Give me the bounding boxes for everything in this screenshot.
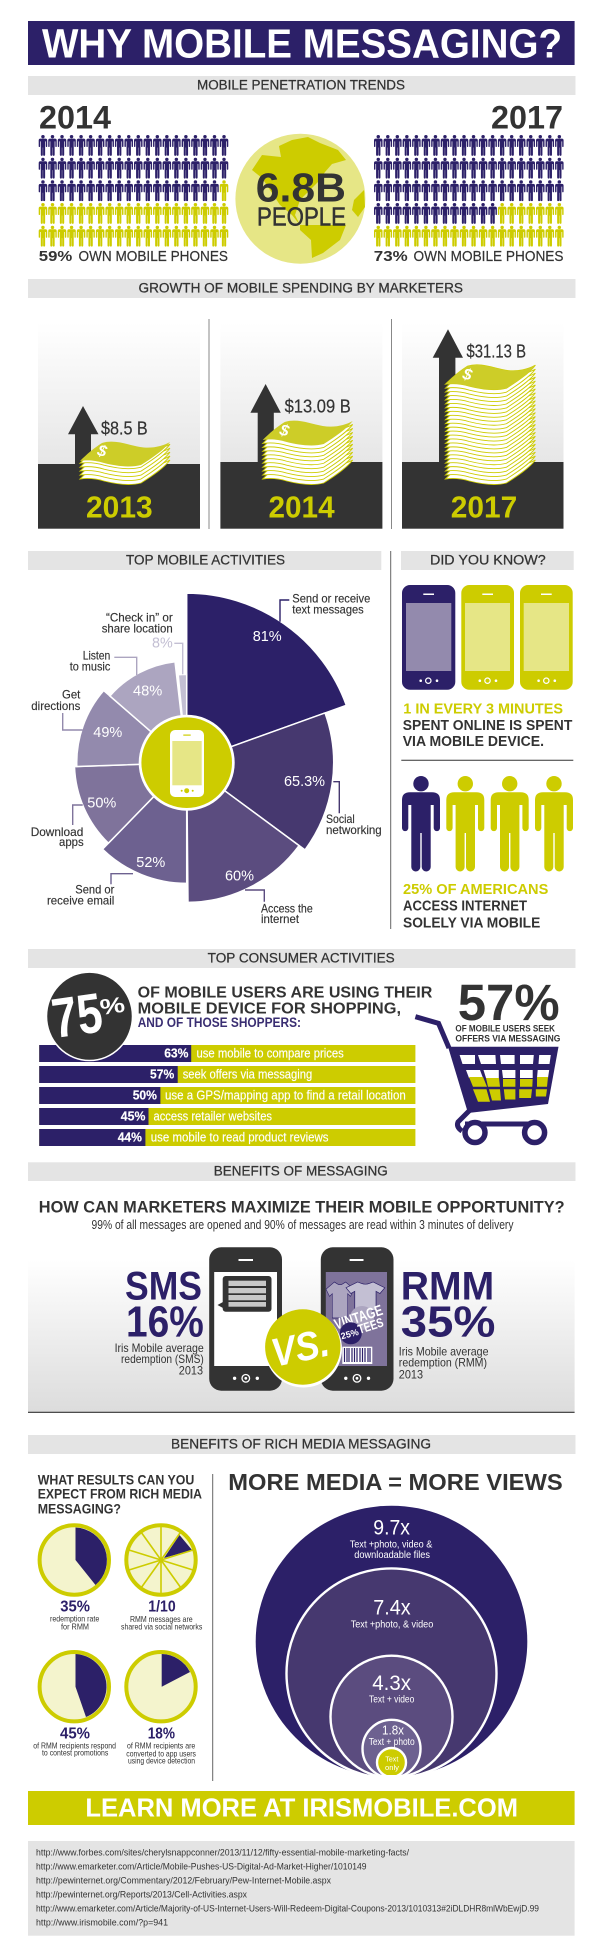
icon: three phones, one highlighted xyxy=(402,585,573,690)
section heading: top consumer activities: TOP CONSUMER ACTIVITIES xyxy=(208,950,395,965)
activity labels xyxy=(31,591,382,926)
statistic: 57% seek offers: OFFERS VIA MESSAGING xyxy=(455,1034,560,1045)
globe with 6.8B people xyxy=(235,134,365,264)
globe with 6.8B people: PEOPLE xyxy=(257,202,346,232)
column: 2014 spending: $ xyxy=(277,422,292,441)
year 2017: 2017 xyxy=(491,100,563,136)
activity labels: Access the xyxy=(261,901,313,915)
section heading: benefits of messaging xyxy=(28,1162,576,1181)
nested circles chart: 9.7x xyxy=(373,1517,410,1540)
section heading: did you know xyxy=(401,551,574,570)
source references: http://www.emarketer.com/Article/Majority-of-US-Internet-Users-Will-Redeem-Digital-Coupons-2013/1010313#2iDLDHR8mlWbEwjD.99 xyxy=(36,1904,539,1915)
heading: what results: MESSAGING? xyxy=(38,1500,121,1516)
icon: shopping cart xyxy=(415,1017,558,1142)
pie: 1 in 10 shared: 1/10 xyxy=(148,1599,176,1616)
statistic: SMS 16% xyxy=(115,1264,204,1377)
fact: 25% of Americans: SOLELY VIA MOBILE xyxy=(403,915,541,931)
activity labels: apps xyxy=(59,835,84,849)
statistic: RMM 35% xyxy=(399,1264,495,1381)
pie: 45% contest: to contest promotions xyxy=(42,1748,108,1758)
pie: 18% converted: converted to app users xyxy=(126,1748,196,1758)
pie: 35% redemption xyxy=(40,1525,109,1631)
statistic: 57% seek offers: 57% xyxy=(458,974,560,1031)
pie: 45% contest: 45% xyxy=(60,1725,90,1742)
badge: 75%: 75 xyxy=(48,981,106,1050)
badge: VS: VS. xyxy=(267,1321,333,1376)
percentage values: 50% xyxy=(87,795,116,811)
statistic: RMM 35%: RMM xyxy=(401,1264,494,1308)
source references: http://www.irismobile.com/?p=941 xyxy=(36,1918,168,1929)
percentage values: 49% xyxy=(93,725,122,741)
shopper bars xyxy=(39,1045,415,1146)
nested circles chart: 1.8x xyxy=(382,1722,404,1737)
panel: top consumer activities xyxy=(28,949,576,1146)
badge: 75%: % xyxy=(98,992,126,1020)
column: 2017 spending xyxy=(402,323,564,529)
section heading: mobile penetration trends: MOBILE PENETRATION TRENDS xyxy=(197,78,405,93)
heading: more media equals more views: MORE MEDIA = MORE VIEWS xyxy=(228,1469,563,1495)
title banner: WHY MOBILE MESSAGING? xyxy=(42,20,562,66)
bar labels: use mobile to read product reviews xyxy=(151,1130,328,1144)
heading: what results: WHAT RESULTS CAN YOU xyxy=(38,1471,194,1487)
icon: RMM phone with rich media ad: TEES xyxy=(356,1314,386,1337)
source references: http://www.emarketer.com/Article/Mobile-Pushes-US-Digital-Ad-Market-Higher/1010149 xyxy=(36,1862,366,1873)
activity labels: to music xyxy=(70,660,110,674)
statistic: RMM 35%: 35% xyxy=(401,1299,495,1347)
column: 2013 spending xyxy=(38,323,200,529)
bar labels: 44% xyxy=(118,1130,142,1144)
column: 2017 spending: $ xyxy=(460,366,475,385)
section heading: benefits of messaging: BENEFITS OF MESSAGING xyxy=(214,1164,388,1179)
activity labels: networking xyxy=(326,823,382,837)
fact: 25% of Americans: ACCESS INTERNET xyxy=(403,899,527,915)
radial pie chart xyxy=(74,593,346,902)
section heading: top mobile activities xyxy=(28,551,381,570)
pie: 18% converted: 18% xyxy=(148,1725,175,1742)
caption: 59 percent: 59% xyxy=(39,249,72,265)
bar labels: 63% xyxy=(164,1046,188,1060)
nested circles chart: downloadable files xyxy=(354,1550,430,1561)
section heading: benefits of rich media messaging xyxy=(28,1435,576,1454)
fact: 1 in every 3 minutes xyxy=(403,701,572,750)
globe with 6.8B people: 6.8B xyxy=(256,165,346,211)
statement: 75% of mobile users: MOBILE DEVICE FOR SHOPPING, xyxy=(138,1001,401,1018)
icon: phone in centre of chart xyxy=(139,715,235,811)
column: 2013 spending: $ xyxy=(94,442,110,461)
activity labels: “Check in” or xyxy=(106,611,173,625)
bar labels xyxy=(118,1046,406,1144)
panel: growth of mobile spending xyxy=(28,279,576,529)
panel: benefits of messaging xyxy=(28,1162,576,1412)
column: 2013 spending: $8.5 B xyxy=(101,417,148,438)
panel: top mobile activities xyxy=(28,551,391,929)
statistic: RMM 35%: 2013 xyxy=(399,1367,423,1381)
statistic: SMS 16%: redemption (SMS) xyxy=(121,1352,204,1366)
statistic: RMM 35%: Iris Mobile average xyxy=(399,1345,489,1359)
percentage values: 48% xyxy=(133,683,162,699)
source references: http://www.forbes.com/sites/cherylsnappconner/2013/11/12/fifty-essential-mobile-marketing-facts/ xyxy=(36,1848,409,1859)
bar labels: 45% xyxy=(121,1109,145,1123)
year 2014: 2014 xyxy=(39,100,111,136)
source references: http://pewinternet.org/Commentary/2012/February/Pew-Internet-Mobile.aspx xyxy=(36,1876,331,1887)
activity labels: receive email xyxy=(47,893,114,907)
activity labels: share location xyxy=(102,622,173,636)
percentage values: 81% xyxy=(253,629,282,645)
column: 2014 spending xyxy=(220,323,382,529)
column: 2017 spending: $31.13 B xyxy=(466,341,526,362)
icon: RMM phone with rich media ad: 25% xyxy=(340,1327,360,1341)
panel: mobile penetration trends xyxy=(28,76,576,265)
pie: 35% redemption: 35% xyxy=(60,1599,90,1616)
panel: did you know xyxy=(401,551,574,931)
nested circles chart: Text +photo, video & xyxy=(350,1540,433,1551)
section heading: benefits of rich media messaging: BENEFITS OF RICH MEDIA MESSAGING xyxy=(171,1436,431,1451)
source references: http://pewinternet.org/Reports/2013/Cell-Activities.aspx xyxy=(36,1890,247,1901)
statistic: RMM 35%: redemption (RMM) xyxy=(399,1356,487,1370)
bar labels: 57% xyxy=(150,1067,174,1081)
badge: 75% xyxy=(46,972,132,1060)
heading: what results: EXPECT FROM RICH MEDIA xyxy=(38,1486,202,1502)
pictogram: 59 of 100 people own phones in 2014 xyxy=(39,135,228,247)
statistic: 57% seek offers: OF MOBILE USERS SEEK xyxy=(455,1024,555,1035)
icon: RMM phone with rich media ad xyxy=(321,1247,394,1391)
pie: 18% converted: using device detection xyxy=(128,1756,195,1766)
bar labels: 50% xyxy=(133,1088,157,1102)
statistic: SMS 16%: SMS xyxy=(125,1264,202,1308)
fact: 1 in every 3 minutes: 1 IN EVERY 3 MINUTES xyxy=(403,701,563,717)
heading: what results xyxy=(38,1471,202,1516)
icon: four people, one highlighted xyxy=(402,776,573,872)
fact: 1 in every 3 minutes: SPENT ONLINE IS SPENT xyxy=(403,718,572,734)
percentage values: 8% xyxy=(152,635,173,651)
activity labels: Send or receive xyxy=(292,591,371,605)
call to action banner: LEARN MORE AT IRISMOBILE.COM xyxy=(85,1793,518,1823)
panel: benefits of rich media messaging xyxy=(28,1435,576,1781)
pictogram: 73 of 100 people own phones in 2017 xyxy=(374,135,564,247)
pie: 1 in 10 shared: shared via social networks xyxy=(121,1622,202,1632)
column: 2014 spending: $13.09 B xyxy=(285,395,351,416)
activity labels: internet xyxy=(261,912,300,926)
activity labels: Download xyxy=(31,825,83,839)
pie: 1 in 10 shared: RMM messages are xyxy=(130,1614,193,1624)
percentage values xyxy=(87,629,325,885)
nested circles chart: 7.4x xyxy=(373,1597,411,1620)
nested circles chart: Text + photo xyxy=(369,1737,415,1748)
column: 2014 spending: 2014 xyxy=(268,491,335,525)
fact: 1 in every 3 minutes: VIA MOBILE DEVICE. xyxy=(403,734,544,750)
nested circles chart: Text + video xyxy=(369,1695,415,1706)
nested circles chart: Text +photo, & video xyxy=(351,1619,434,1630)
pie: 18% converted xyxy=(126,1652,196,1766)
activity labels: directions xyxy=(31,699,80,713)
caption: 73 percent: OWN MOBILE PHONES xyxy=(414,249,564,265)
leader lines xyxy=(63,600,339,902)
bar labels: use a GPS/mapping app to find a retail location xyxy=(165,1088,406,1102)
statement: 75% of mobile users xyxy=(138,985,433,1030)
pie: 35% redemption: redemption rate xyxy=(50,1614,100,1624)
activity labels: Send or xyxy=(75,882,114,896)
section heading: top mobile activities: TOP MOBILE ACTIVITIES xyxy=(126,553,285,568)
section heading: mobile penetration trends xyxy=(28,76,576,95)
statement: 75% of mobile users: AND OF THOSE SHOPPERS: xyxy=(138,1015,301,1030)
statement: 75% of mobile users: OF MOBILE USERS ARE USING THEIR xyxy=(138,985,433,1002)
statistic: SMS 16%: 16% xyxy=(126,1299,204,1347)
statistic: SMS 16%: Iris Mobile average xyxy=(115,1341,204,1355)
caption: 73 percent: 73% xyxy=(374,249,408,265)
fact: 25% of Americans: 25% OF AMERICANS xyxy=(403,882,549,898)
pie: 35% redemption: for RMM xyxy=(61,1621,89,1631)
nested circles chart: only xyxy=(385,1763,399,1772)
pie: 1 in 10 shared xyxy=(121,1525,202,1632)
column: 2017 spending: 2017 xyxy=(451,491,517,525)
nested circles chart xyxy=(256,1506,527,1778)
column: 2013 spending: 2013 xyxy=(86,491,153,525)
fact: 25% of Americans xyxy=(403,882,549,931)
subheading: 99% of all messages are opened and 90% of messages are read within 3 minutes of delivery xyxy=(92,1218,514,1232)
section heading: did you know: DID YOU KNOW? xyxy=(430,553,546,568)
percentage values: 52% xyxy=(136,855,165,871)
pie: 45% contest: of RMM recipients respond xyxy=(33,1740,116,1750)
percentage values: 65.3% xyxy=(284,774,325,790)
icon: RMM phone with rich media ad: VINTAGE xyxy=(332,1302,385,1334)
percentage values: 60% xyxy=(225,869,254,885)
source references xyxy=(28,1841,575,1936)
comparison backdrop xyxy=(28,1260,575,1412)
section heading: top consumer activities xyxy=(28,949,576,968)
bar labels: access retailer websites xyxy=(154,1109,272,1123)
activity labels: text messages xyxy=(292,602,364,616)
icon: SMS phone xyxy=(209,1247,282,1391)
nested circles chart: 4.3x xyxy=(372,1672,411,1695)
section heading: growth of mobile spending: GROWTH OF MOBILE SPENDING BY MARKETERS xyxy=(138,280,463,295)
pie: 45% contest xyxy=(33,1652,116,1758)
statistic: SMS 16%: 2013 xyxy=(179,1363,203,1377)
activity labels: Social xyxy=(326,812,355,826)
caption: 59 percent: OWN MOBILE PHONES xyxy=(78,249,228,265)
badge: VS xyxy=(265,1309,342,1388)
activity labels: Get xyxy=(62,688,81,702)
bar labels: use mobile to compare prices xyxy=(196,1046,344,1060)
activity labels: Listen xyxy=(83,648,110,662)
question heading: HOW CAN MARKETERS MAXIMIZE THEIR MOBILE OPPORTUNITY? xyxy=(39,1197,565,1216)
pie: 18% converted: of RMM recipients are xyxy=(127,1740,196,1750)
nested circles chart: Text xyxy=(385,1755,399,1764)
section heading: growth of mobile spending xyxy=(28,279,576,298)
bar labels: seek offers via messaging xyxy=(183,1067,312,1081)
